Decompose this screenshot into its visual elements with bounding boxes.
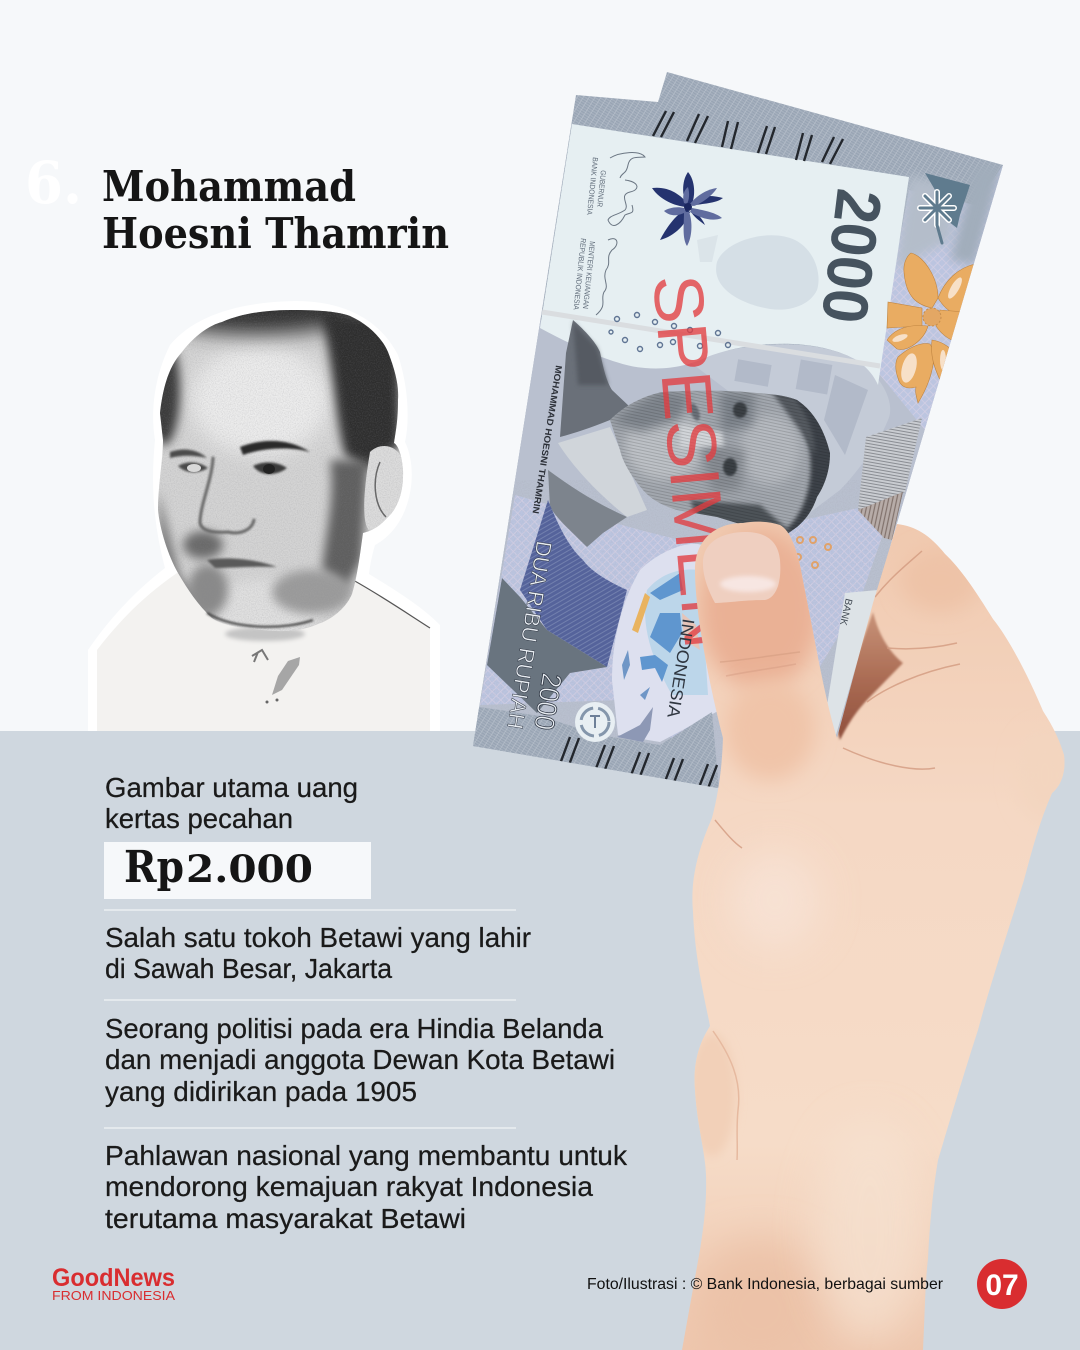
- hand holding the note: [682, 522, 1073, 1350]
- portrait collar knot: [252, 650, 300, 704]
- pale lower right strip: [826, 590, 878, 735]
- title: [102, 162, 449, 258]
- stripes patch: [858, 418, 922, 510]
- name on note: MOHAMMAD HOESNI THAMRIN: [531, 365, 564, 514]
- security bar: [542, 312, 880, 366]
- background upper area: [0, 0, 1080, 731]
- hand shading: [688, 530, 1073, 1350]
- title: Mohammad: [102, 162, 356, 211]
- top tick marks: [653, 111, 843, 164]
- title: Hoesni Thamrin: [102, 209, 449, 258]
- fact one: Salah satu tokoh Betawi yang lahir: [105, 922, 531, 953]
- portrait head: [158, 310, 404, 631]
- banknote Rp2000: [460, 60, 1020, 800]
- batik oval: [690, 344, 890, 520]
- bank name fragment: INDONESIA: [663, 617, 698, 720]
- description text: [104, 772, 628, 1234]
- fact two: dan menjadi anggota Dewan Kota Betawi: [105, 1044, 615, 1075]
- portrait white outline: [88, 301, 440, 731]
- slate corner with white flower: [920, 173, 970, 243]
- portrait facial features: [170, 441, 313, 627]
- signature labels: [574, 158, 606, 310]
- orange flower: [887, 253, 975, 403]
- denomination value: Rp: [124, 842, 184, 893]
- pad fold: [694, 1034, 736, 1155]
- denomination 2000 top: 2000: [808, 185, 896, 327]
- navy ribbon: [520, 500, 627, 667]
- hat corner: [560, 320, 630, 437]
- fact three: Pahlawan nasional yang membantu untuk: [105, 1140, 628, 1171]
- portrait photo of Thamrin: [88, 278, 440, 731]
- denomination value box: [104, 842, 371, 899]
- number six: 6.: [25, 149, 82, 217]
- globe and map: [612, 544, 720, 742]
- logo GoodNews from Indonesia: GoodNews: [52, 1264, 175, 1292]
- logo GoodNews from Indonesia: FROM INDONESIA: [52, 1288, 175, 1303]
- fact one: [105, 922, 531, 984]
- denomination intro: kertas pecahan: [105, 803, 293, 834]
- fact two: [105, 1013, 615, 1107]
- fact two: yang didirikan pada 1905: [105, 1076, 417, 1107]
- jacket: [548, 470, 627, 547]
- fact three: terutama masyarakat Betawi: [105, 1203, 466, 1234]
- page number badge: [977, 1259, 1027, 1309]
- collar: [558, 427, 647, 517]
- bottom guilloche band: [473, 707, 718, 788]
- fact three: [105, 1140, 628, 1234]
- signature labels: GUBERNUR: [595, 170, 608, 208]
- value in words: DUA RIBU RUPIAH: [502, 539, 557, 731]
- watermark ghost portrait: [697, 235, 819, 310]
- photo credit: Foto/Ilustrasi : © Bank Indonesia, berbagai sumber: [587, 1276, 944, 1293]
- denomination value: 2.000: [186, 847, 313, 891]
- signature labels: BANK INDONESIA: [585, 157, 600, 215]
- ear: [364, 446, 404, 532]
- small 2000: 2000: [528, 671, 568, 732]
- bottom tick marks: [560, 737, 717, 791]
- engraved face: [610, 390, 830, 534]
- lower note body: [473, 320, 925, 788]
- signature labels: MENTERI KEUANGAN: [581, 241, 597, 309]
- page number badge: 07: [985, 1269, 1019, 1302]
- security seal: [575, 702, 615, 742]
- banknote Rp2000: BANK: [837, 597, 854, 627]
- background lower panel: [0, 731, 1080, 1350]
- signature labels: REPUBLIK INDONESIA: [571, 238, 588, 310]
- thumbnail: [703, 532, 780, 603]
- fact three: mendorong kemajuan rakyat Indonesia: [105, 1171, 593, 1202]
- specimen overprint: SPESIMEN: [638, 272, 748, 652]
- denomination intro: [105, 772, 358, 834]
- logo GoodNews from Indonesia: [52, 1264, 175, 1303]
- security dots: [609, 312, 730, 352]
- note base: [460, 60, 1020, 800]
- right lilac band: [880, 166, 1002, 520]
- dark band: [487, 578, 607, 713]
- white watermark panel: [540, 124, 909, 385]
- portrait shirt: [97, 573, 430, 731]
- orange dots: [795, 537, 831, 568]
- navy flower: [652, 172, 723, 246]
- denomination intro: Gambar utama uang: [105, 772, 358, 803]
- signatures: [596, 153, 645, 315]
- fact one: di Sawah Besar, Jakarta: [105, 953, 392, 984]
- fact two: Seorang politisi pada era Hindia Belanda: [105, 1013, 603, 1044]
- finger creases: [715, 551, 960, 848]
- finger gap shadow: [834, 612, 903, 740]
